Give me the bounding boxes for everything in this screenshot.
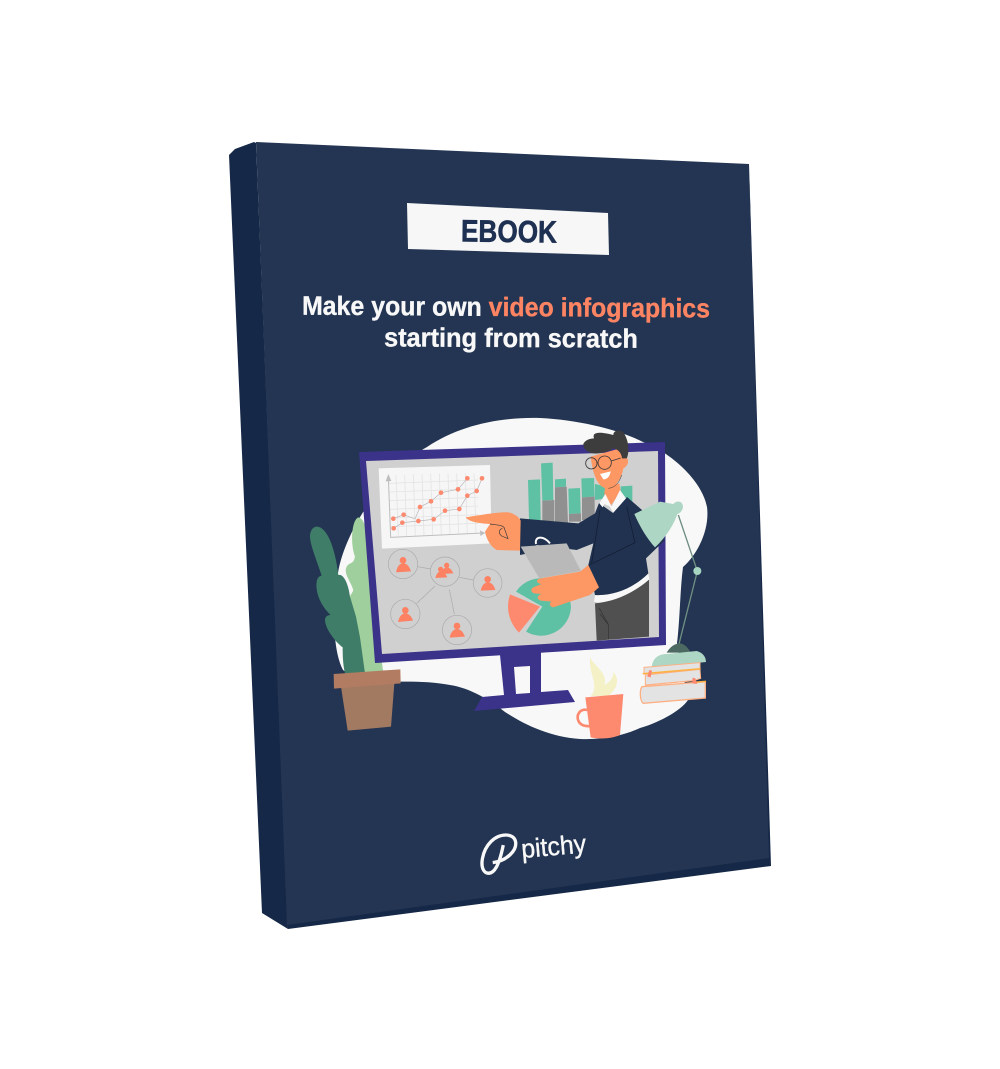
glasses bbox=[586, 456, 621, 469]
neck bbox=[604, 483, 621, 507]
presenter body bbox=[520, 497, 665, 641]
coffee mug bbox=[578, 694, 623, 738]
book spine bbox=[229, 142, 771, 929]
monitor bbox=[359, 442, 666, 663]
hand holding clipboard bbox=[531, 565, 599, 607]
pointing hand bbox=[466, 512, 521, 551]
shirt collar bbox=[599, 490, 626, 513]
clipboard bbox=[521, 538, 581, 578]
face bbox=[591, 448, 628, 488]
desk lamp bbox=[634, 501, 701, 644]
plant bbox=[310, 517, 383, 673]
bar chart bbox=[528, 463, 632, 523]
white blob background bbox=[334, 418, 707, 739]
logo mark bbox=[482, 835, 516, 873]
ebook label bbox=[407, 203, 609, 255]
smile bbox=[600, 471, 611, 479]
people network diagram bbox=[388, 549, 502, 645]
sweater and arm bbox=[520, 497, 665, 595]
subtitle: starting from scratch bbox=[384, 322, 638, 354]
plant pot bbox=[334, 669, 401, 731]
shirt hem bbox=[594, 573, 649, 603]
monitor screen bbox=[366, 451, 659, 654]
presenter head bbox=[583, 431, 628, 513]
pitchy logo bbox=[482, 828, 587, 873]
logo wordmark: pitchy bbox=[520, 828, 587, 864]
hair bbox=[583, 431, 628, 458]
pie chart bbox=[508, 578, 571, 636]
ebook label: EBOOK bbox=[461, 213, 558, 250]
monitor stand bbox=[474, 650, 575, 711]
title: Make your own video infographics bbox=[302, 291, 710, 323]
trousers bbox=[595, 578, 649, 641]
book front cover bbox=[256, 142, 769, 925]
stack of books bbox=[640, 643, 706, 703]
line chart panel bbox=[379, 465, 492, 549]
coffee steam bbox=[590, 657, 617, 696]
